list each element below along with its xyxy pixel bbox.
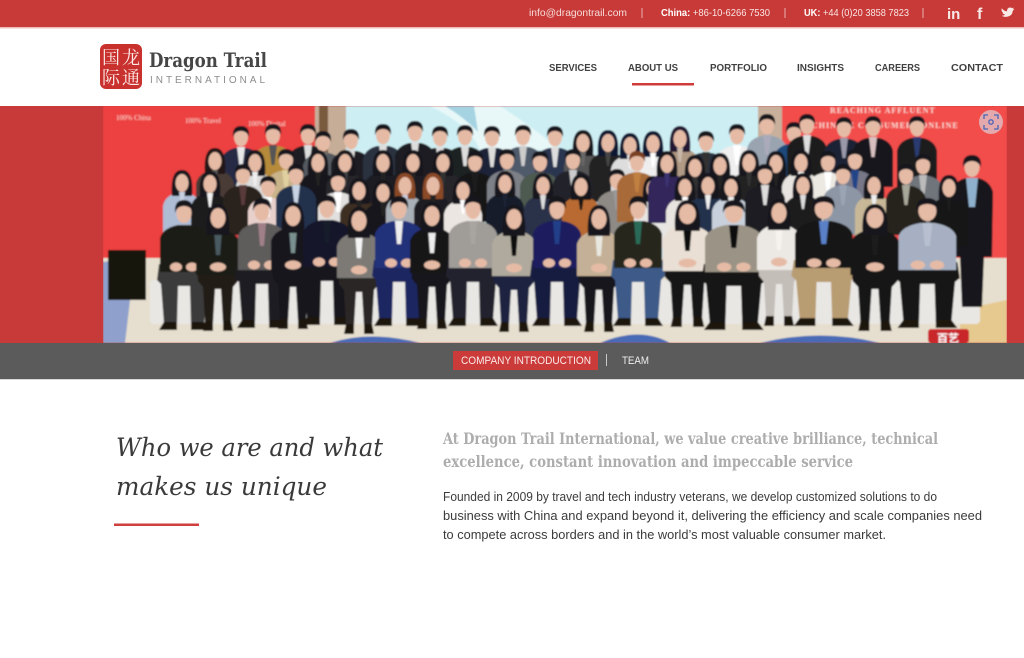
main navigation: CAREERS: [875, 62, 920, 74]
logo seal: 国龙: [102, 44, 140, 70]
main navigation: CONTACT: [951, 62, 1004, 74]
heading underline: [114, 524, 199, 526]
red sign at bottom of photo: 百艺: [937, 330, 959, 346]
UK phone: UK: +44 (0)20 3858 7823: [804, 7, 909, 19]
backdrop slogans: 100% Digital: [248, 120, 286, 128]
active tab: company introduction: COMPANY INTRODUCTION: [461, 355, 591, 367]
backdrop slogans: 100% China: [116, 114, 152, 122]
backdrop slogans: [116, 106, 959, 130]
section heading: makes us unique: [116, 472, 327, 501]
hero band: [0, 106, 1024, 346]
icon: facebook: f: [977, 6, 983, 23]
top contact bar: [0, 0, 1024, 28]
second row of people: [196, 148, 993, 307]
icon: image scan button: [979, 110, 1003, 134]
main navigation: [549, 62, 1004, 86]
active tab: company introduction: [453, 351, 598, 370]
backdrop slogans: REACHING AFFLUENT: [830, 106, 936, 115]
back row of people: [221, 114, 937, 205]
section heading: [116, 433, 384, 501]
logo seal: [100, 44, 142, 90]
logo: [100, 44, 267, 90]
main navigation: SERVICES: [549, 62, 597, 74]
hero team photo: [103, 106, 1007, 346]
red sign at bottom of photo: [928, 329, 969, 346]
chairs: [150, 280, 980, 324]
section tabs bar: [0, 343, 1024, 380]
intro subheading: [442, 429, 938, 471]
third row of people: [163, 151, 968, 252]
intro body text: [443, 489, 982, 542]
intro body text: business with China and expand beyond it, delivering the efficiency and scale companies need: [443, 508, 982, 523]
icon: twitter: [1002, 8, 1014, 17]
icon: linkedin: in: [947, 6, 960, 23]
logo tagline: INTERNATIONAL: [150, 75, 265, 86]
photo backdrop: [103, 106, 1007, 343]
tab: team: TEAM: [622, 355, 649, 367]
main navigation: ABOUT US: [628, 62, 678, 74]
intro body text: Founded in 2009 by travel and tech industry veterans, we develop customized solutions to do: [443, 489, 937, 504]
logo seal: 际通: [102, 64, 140, 90]
main navigation: INSIGHTS: [797, 62, 844, 74]
main navigation: PORTFOLIO: [710, 62, 767, 74]
intro subheading: excellence, constant innovation and impeccable service: [443, 452, 853, 471]
email address: info@dragontrail.com: [529, 7, 627, 19]
intro body text: to compete across borders and in the world’s most valuable consumer market.: [443, 527, 886, 542]
China phone: China: +86-10-6266 7530: [661, 7, 770, 19]
backdrop slogans: 100% Travel: [185, 117, 221, 125]
backdrop slogans: CHINESE CONSUMERS ONLINE: [812, 121, 959, 130]
logo wordmark: Dragon Trail: [149, 48, 267, 72]
section heading: Who we are and what: [116, 433, 384, 462]
front seated row of people: [157, 195, 960, 334]
